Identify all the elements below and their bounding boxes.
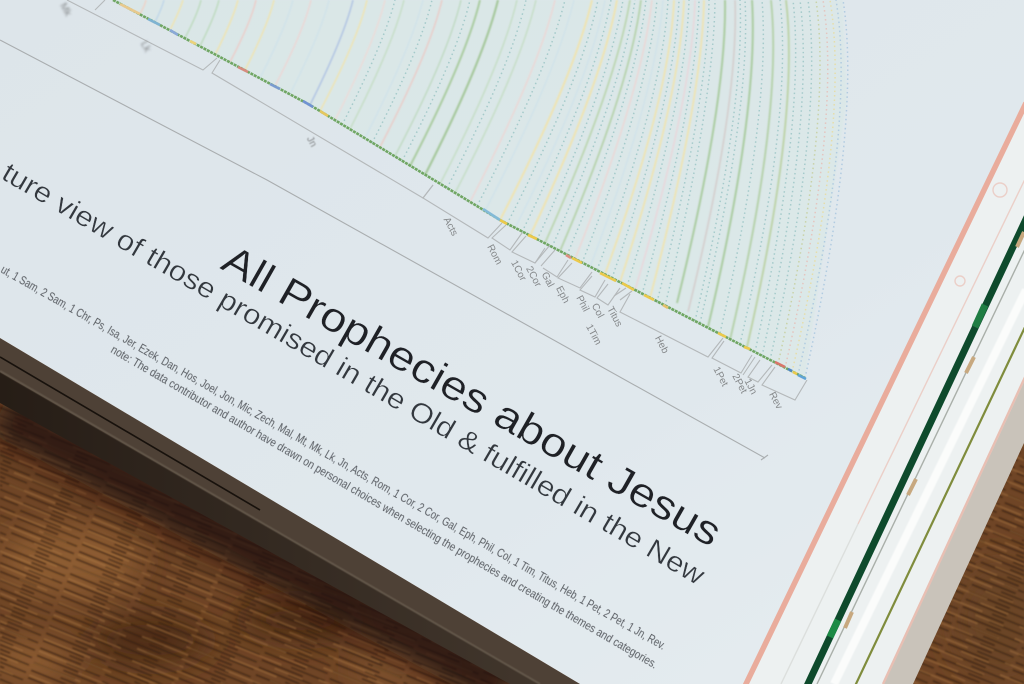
arc chart of prophecies [113, 0, 848, 379]
book abbreviation labels: Acts [441, 216, 460, 238]
pale pink line with markers on next page [781, 175, 1024, 684]
book abbreviation labels: Jn [304, 135, 319, 149]
linen book cover on the right [882, 378, 1024, 684]
dotted arcs [342, 0, 848, 378]
pink page border line [745, 103, 1024, 684]
book abbreviation labels: 1Pet [711, 365, 730, 389]
baseline of coloured dots [113, 0, 806, 379]
book abbreviation labels: Titus [604, 305, 624, 329]
book abbreviation labels: Gal [539, 270, 556, 289]
title: All Prophecies about Jesus [215, 236, 729, 555]
dark green page edge stripe [807, 215, 1024, 684]
book abbreviation labels: Rev [766, 390, 784, 411]
book abbreviation labels: Lk [138, 40, 153, 55]
book abbreviation labels: Heb [652, 334, 671, 356]
book section brackets [67, 0, 807, 400]
book abbreviation labels: Rom [484, 243, 504, 267]
solid arcs [140, 0, 789, 347]
book cover and page block edge [0, 338, 580, 684]
subtitle: ture view of those promised in the Old & fulfilled in the New [0, 156, 711, 591]
book abbreviation labels: 2Pet [730, 372, 749, 396]
page stack edge [735, 100, 1024, 684]
small tan page tabs [845, 232, 1024, 628]
book abbreviation labels [57, 1, 784, 411]
grey and olive page edge lines [817, 245, 1024, 684]
book abbreviation labels: Mk [57, 1, 74, 19]
book abbreviation labels: 1Cor [508, 259, 528, 284]
book abbreviation labels: 2Cor [523, 265, 543, 290]
book abbreviation labels: Eph [553, 284, 571, 305]
book abbreviation labels: Phil [573, 294, 591, 314]
wood colour blotches [0, 525, 1024, 684]
book abbreviation labels: 1Jn [742, 377, 759, 397]
book abbreviation labels: Col [589, 302, 606, 320]
divider line under chart [0, 40, 768, 460]
book abbreviation labels: 1Tim [583, 323, 603, 347]
chart tint [113, 0, 847, 378]
